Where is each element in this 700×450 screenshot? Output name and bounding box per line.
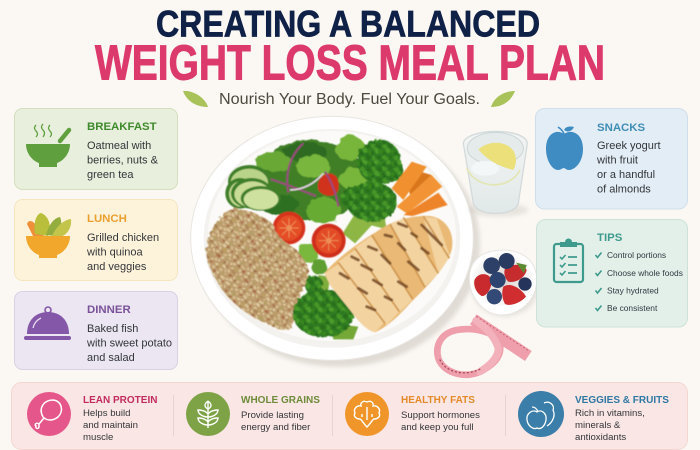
glass of water with lemon [463,131,528,217]
body: muscle [83,432,113,443]
slice edges [338,216,449,323]
heading: HEALTHY FATS [401,395,475,406]
heading: TIPS [597,232,623,244]
icon: right leaf [491,91,515,107]
body: Support hormones [401,410,480,421]
body: Helps build [83,408,130,419]
grilled chicken [324,216,452,332]
icon: apple and leaf [518,391,564,437]
body: and keep you full [401,422,474,433]
veggies and fruits [518,391,669,443]
body: or a handful [597,169,655,181]
whole grains [186,392,320,436]
panel: snacks [536,108,688,209]
panel: breakfast [14,108,178,190]
panel: dinner [14,292,178,370]
bowl of berries [469,250,538,317]
heading: SNACKS [597,122,646,134]
broccoli bottom [293,275,358,339]
title [95,4,605,90]
card background [536,108,688,209]
carrot sticks [392,162,448,216]
tomato halves [273,212,346,258]
panel: nutrition strip [12,382,688,450]
body: and salad [87,352,135,364]
body: with fruit [596,154,638,166]
body: Oatmeal with [87,140,151,152]
body: of almonds [597,184,651,196]
salad greens [255,136,375,275]
body: Rich in vitamins, [575,408,645,419]
icon: apple [546,126,583,170]
chicken silhouette [324,216,452,332]
healthy fats [345,392,480,436]
checklist: Control portions [607,250,666,260]
tagline text: Nourish Your Body. Fuel Your Goals. [219,91,480,108]
body: energy and fiber [241,422,311,433]
card background [536,220,688,327]
grill marks [340,223,442,310]
divider [174,395,506,436]
plate and food illustration [191,116,538,375]
plate shadow [197,123,480,367]
heading: LUNCH [87,213,127,225]
body: and veggies [87,261,147,273]
heading: DINNER [87,304,131,316]
food group [206,136,452,339]
body: Baked fish [87,323,138,335]
icon: left leaf [183,91,208,107]
body: with sweet potato [86,338,172,350]
icon: clipboard checklist [554,239,583,282]
icon: salad bowl [26,213,71,258]
heading: BREAKFAST [87,121,157,133]
checklist: Choose whole foods [607,268,683,278]
icon: cloche [24,307,71,340]
checklist: Stay hydrated [607,286,659,296]
broccoli centre [341,182,397,243]
card background [14,108,178,190]
slice faces [324,217,450,332]
icon: leaf [345,392,389,436]
panel: lunch [14,200,178,280]
body: green tea [87,169,134,181]
card background [14,200,178,280]
measuring tape [437,317,530,375]
title line 1: CREATING A BALANCED [156,4,540,44]
icon: wheat [186,392,230,436]
heading: LEAN PROTEIN [83,395,157,406]
quinoa [206,208,309,330]
body: antioxidants [575,432,626,443]
plate [191,116,473,360]
body: Grilled chicken [87,232,159,244]
body: berries, nuts & [87,154,159,166]
checklist: Be consistent [607,303,658,313]
body: and maintain [83,420,138,431]
tagline [183,91,515,108]
card background [14,292,178,370]
checklist [596,250,683,313]
body: Provide lasting [241,410,304,421]
heading: WHOLE GRAINS [241,395,320,406]
body: Greek yogurt [597,140,661,152]
body: minerals & [575,420,621,431]
icon: bowl with steam [26,124,70,167]
body: with quinoa [86,246,144,258]
strip background [12,382,688,450]
red onion and cherry tomato in salad [271,143,339,207]
icon: drumstick [27,392,71,436]
lean protein [27,392,157,443]
heading: VEGGIES & FRUITS [575,395,669,406]
panel: tips [536,220,688,327]
broccoli top right [357,140,403,184]
cucumber slices [225,165,281,211]
